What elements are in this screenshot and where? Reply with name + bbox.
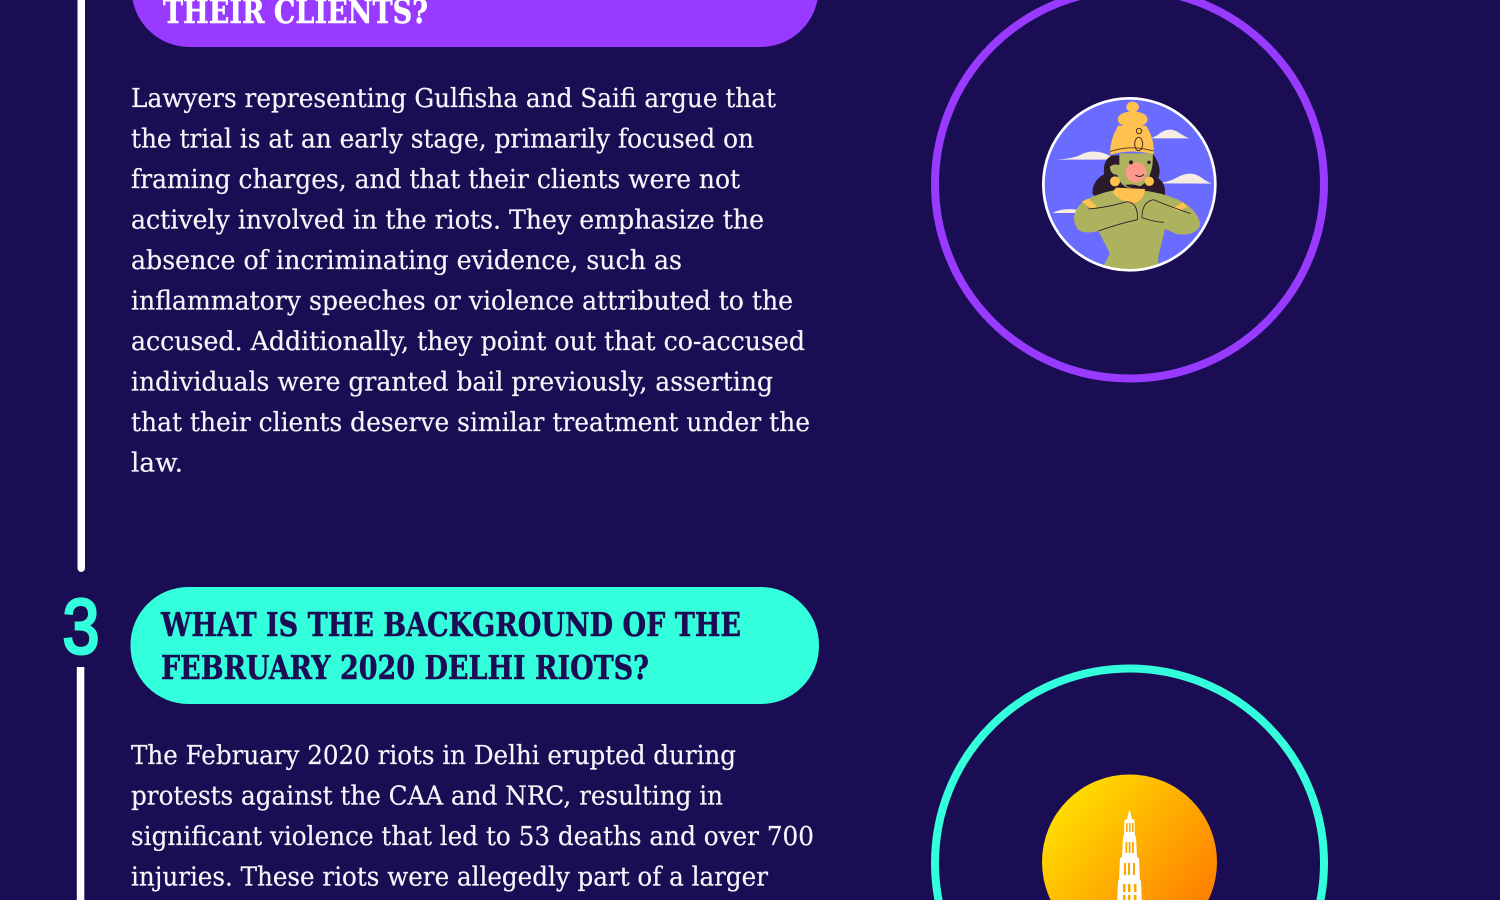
section 2 image ring (935, 0, 1324, 378)
section 2 body text: actively involved in the riots. They emphasize the (131, 206, 764, 236)
icon: Hanuman illustration (1043, 98, 1216, 272)
section 3 image ring (935, 668, 1324, 900)
section 3 body text: protests against the CAA and NRC, resulting in (131, 782, 723, 812)
section 2 body text: that their clients deserve similar treatment under the (131, 408, 810, 438)
section 3 heading text: WHAT IS THE BACKGROUND OF THE (160, 605, 741, 644)
section 3 number: 3 (62, 582, 100, 670)
section 2 heading pill (132, 0, 818, 47)
section 3 body text (131, 741, 814, 892)
section 3 heading pill (130, 587, 819, 704)
section 3 body text: significant violence that led to 53 deaths and over 700 (131, 822, 814, 852)
timeline line: section 3 (77, 667, 84, 900)
section 2 body text: absence of incriminating evidence, such as (131, 246, 682, 276)
section 2 body text: framing charges, and that their clients were not (131, 165, 741, 195)
section 2 body text: accused. Additionally, they point out that co-accused (131, 327, 805, 357)
timeline line: section 2 (78, 0, 85, 572)
section 2 body text: inflammatory speeches or violence attributed to the (131, 286, 793, 316)
section 2 body text: Lawyers representing Gulfisha and Saifi argue that (131, 84, 777, 114)
section 2 body text: individuals were granted bail previously, asserting (131, 368, 773, 398)
section 3 heading text: FEBRUARY 2020 DELHI RIOTS? (161, 648, 649, 687)
section 3 body text: The February 2020 riots in Delhi erupted during (131, 741, 736, 771)
section 2 body text (131, 84, 810, 478)
section 2 body text: the trial is at an early stage, primarily focused on (131, 124, 754, 154)
section 3 body text: injuries. These riots were allegedly part of a larger (131, 862, 769, 892)
section 3 heading text (160, 605, 741, 687)
section 2 body text: law. (131, 448, 183, 478)
icon: sun with Qutub Minar tower (1042, 774, 1217, 900)
